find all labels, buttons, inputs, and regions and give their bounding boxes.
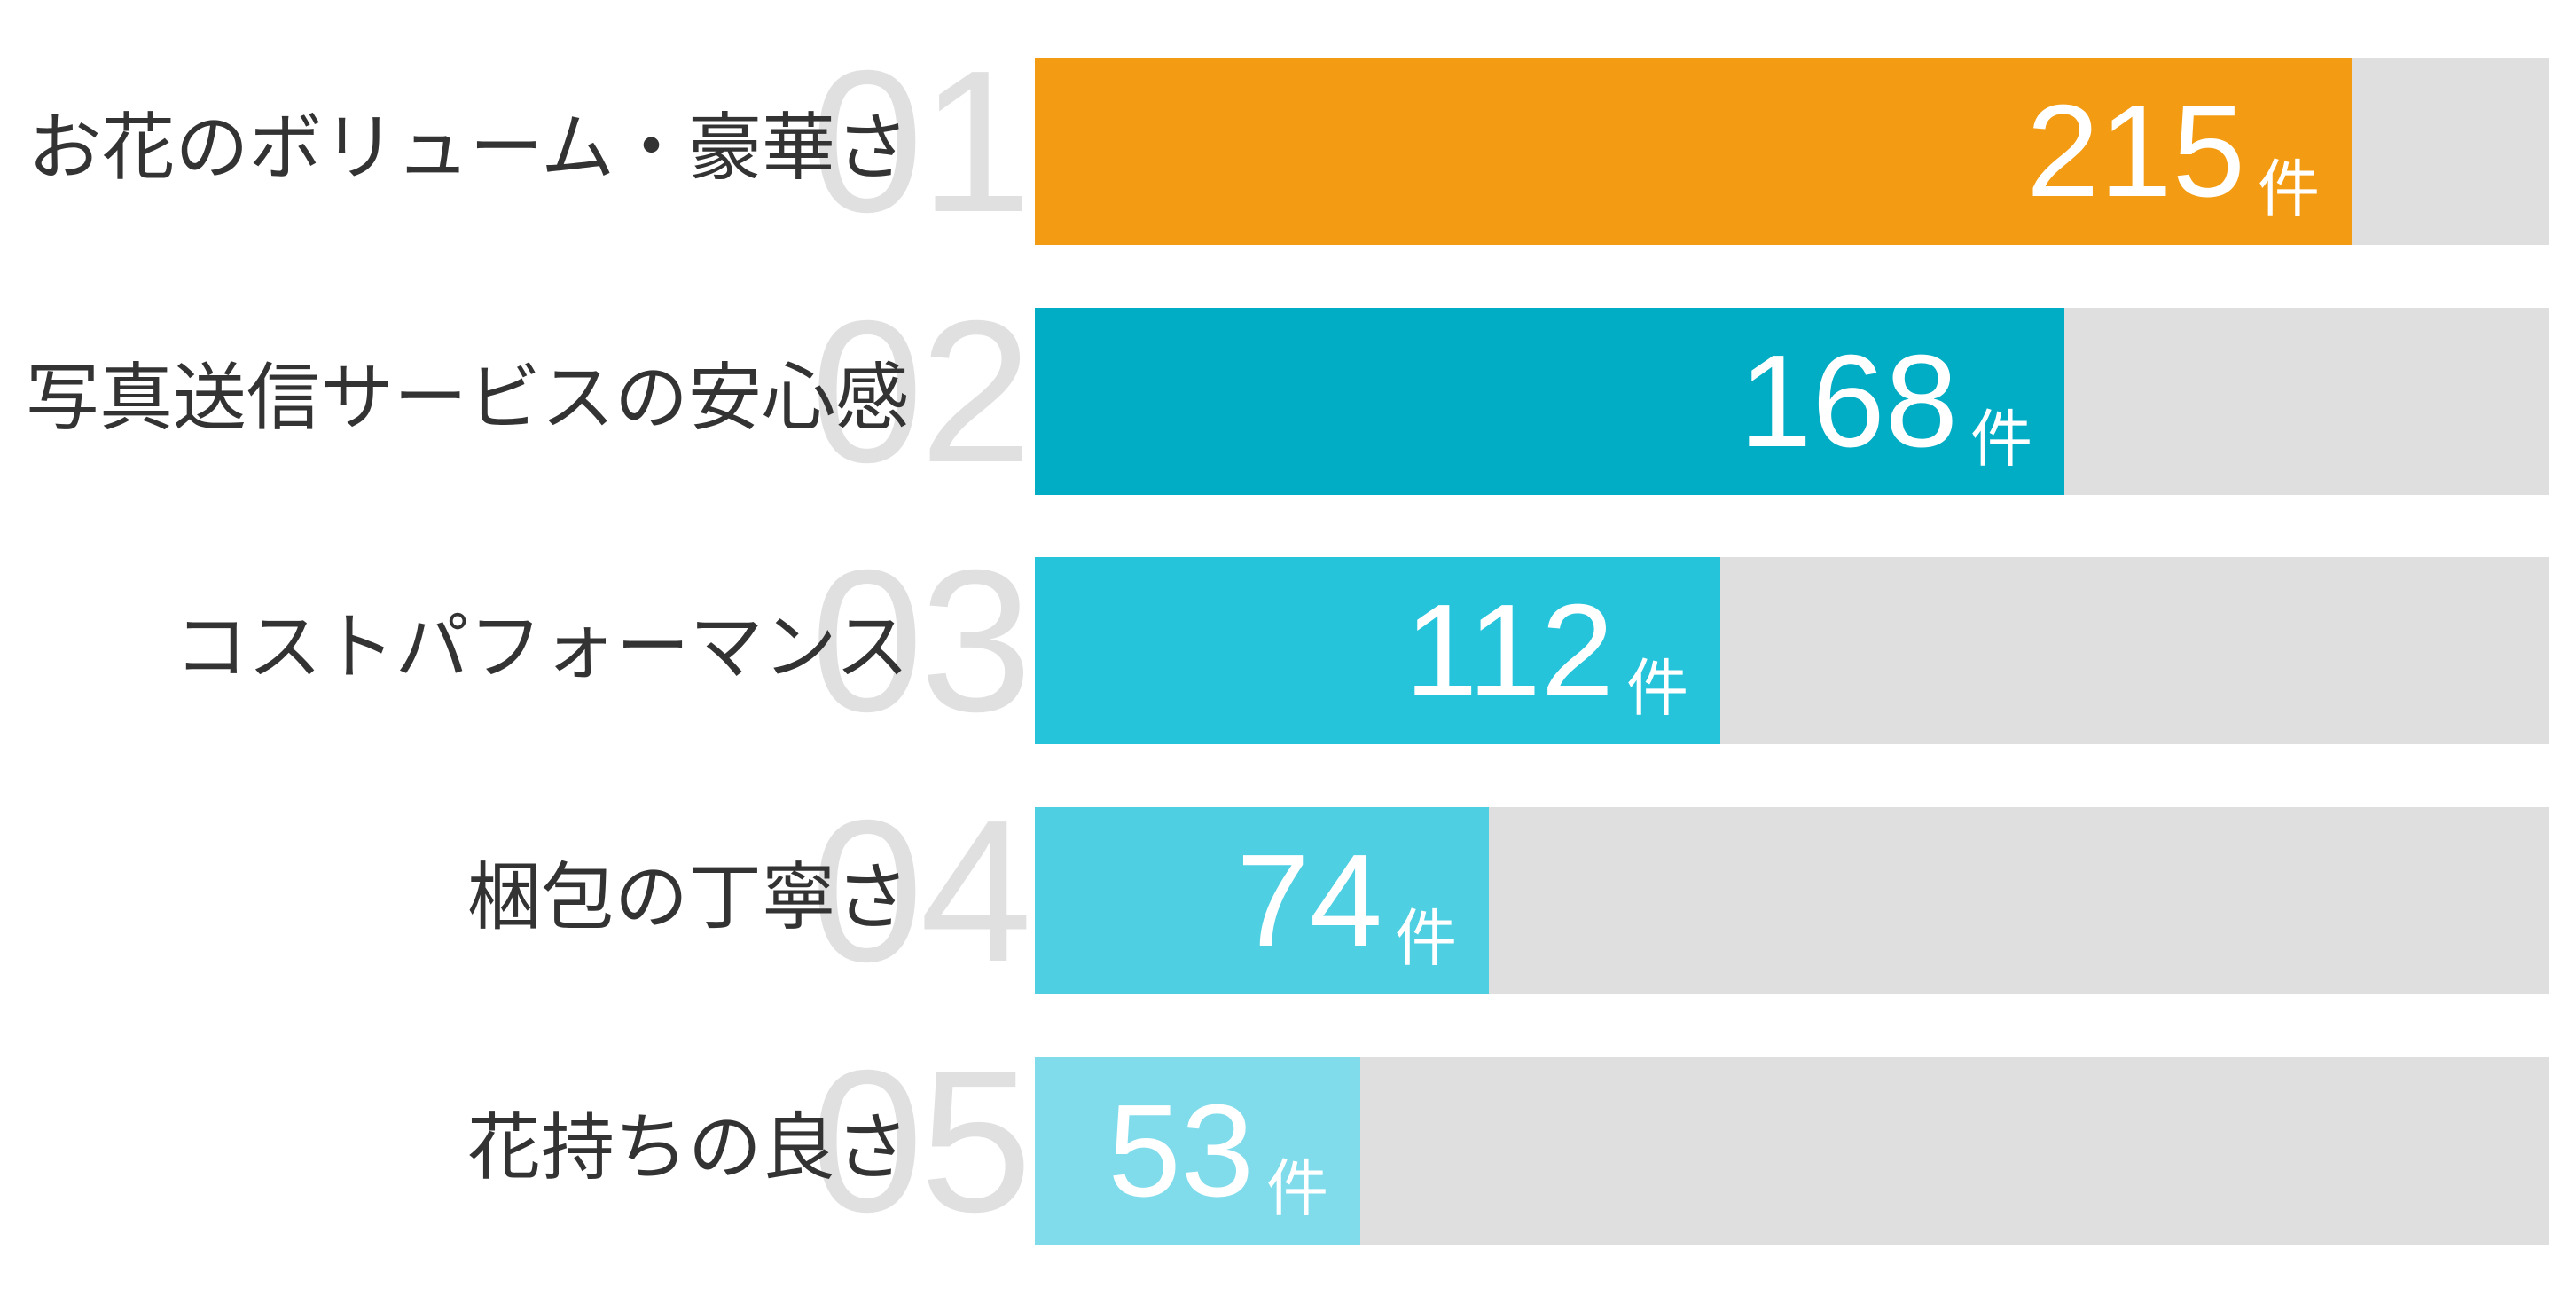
bar 2: 件 xyxy=(1970,405,2032,474)
bar 4 xyxy=(1035,807,2549,994)
index number 05: 05 xyxy=(810,1029,1029,1254)
bar 2: 168 xyxy=(1739,328,1958,475)
bar 2 xyxy=(1035,308,2549,495)
bar 1 xyxy=(1035,58,2549,245)
row 3 xyxy=(175,529,2549,754)
bar 1: 件 xyxy=(2258,154,2320,224)
bar 4: 74 xyxy=(1236,828,1382,974)
bar 3: 112 xyxy=(1405,577,1614,724)
row 5 xyxy=(467,1029,2549,1254)
bar 1: 215 xyxy=(2026,78,2245,224)
index number 03: 03 xyxy=(810,529,1029,754)
row 1 xyxy=(27,29,2549,255)
bar 3 xyxy=(1035,557,2549,744)
index number 04: 04 xyxy=(810,779,1029,1004)
index number 01: 01 xyxy=(810,29,1029,255)
label 1: お花のボリューム・豪華さ xyxy=(27,106,909,189)
row 4 xyxy=(467,779,2549,1004)
label 2: 写真送信サービスの安心感 xyxy=(26,357,909,439)
label 4: 梱包の丁寧さ xyxy=(467,856,909,939)
bar 5: 件 xyxy=(1266,1154,1328,1223)
label 3: コストパフォーマンス xyxy=(175,606,909,688)
bar 5: 53 xyxy=(1108,1078,1254,1224)
label 5: 花持ちの良さ xyxy=(467,1106,909,1189)
bar 4: 件 xyxy=(1395,904,1457,973)
index number 02: 02 xyxy=(810,279,1029,505)
row 2 xyxy=(26,279,2549,505)
bar 3: 件 xyxy=(1626,654,1688,723)
bar 5 xyxy=(1035,1057,2549,1245)
